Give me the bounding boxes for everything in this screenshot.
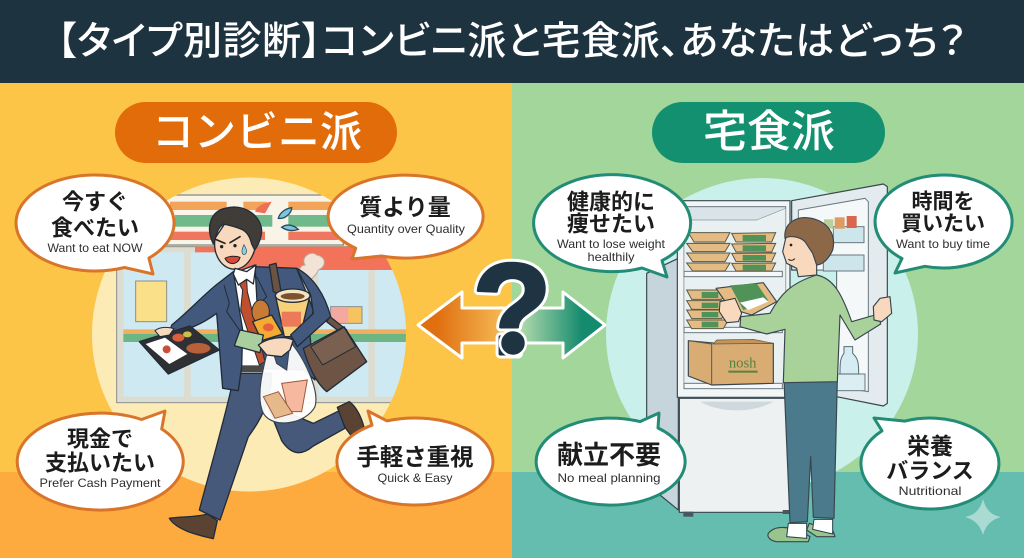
callout: lose weight healthily: healthily bbox=[588, 250, 634, 264]
callout: want to eat now bbox=[16, 175, 174, 274]
callout: quick and easy: Quick & Easy bbox=[378, 471, 452, 485]
sweat drops bbox=[278, 208, 298, 231]
panel: home delivery background bbox=[512, 83, 1024, 558]
callout: no meal planning bbox=[536, 413, 685, 505]
heading: home delivery type bbox=[652, 102, 885, 163]
callout: want to eat now: 食べたい bbox=[51, 216, 139, 240]
jacket left and arm bbox=[169, 272, 243, 391]
callout: prefer cash payment: 支払いたい bbox=[45, 450, 155, 476]
meal stacks: green trays bbox=[732, 233, 776, 271]
callout: want to buy time: Want to buy time bbox=[896, 237, 990, 251]
callout: no meal planning: 献立不要 bbox=[557, 440, 661, 470]
fridge side bbox=[647, 258, 678, 510]
fridge freezer drawer bbox=[679, 398, 791, 517]
callout: want to buy time bbox=[875, 175, 1012, 273]
callout: want to buy time: 時間を bbox=[912, 190, 974, 214]
callout: nutritional balance: Nutritional bbox=[898, 484, 962, 498]
tie bbox=[239, 280, 265, 365]
head bbox=[210, 207, 262, 269]
meal stacks: lower shelf bbox=[687, 290, 728, 329]
bag shoulder strap bbox=[327, 317, 347, 333]
rear leg bbox=[267, 403, 345, 453]
nosh cardboard box bbox=[688, 339, 773, 385]
callout: prefer cash payment: 現金で bbox=[67, 426, 133, 452]
meal stacks: brown trays bbox=[687, 233, 730, 271]
callout: want to buy time: 買いたい bbox=[901, 212, 985, 236]
hand bbox=[258, 338, 293, 357]
callout: nutritional balance: バランス bbox=[886, 458, 974, 484]
front leg bbox=[199, 373, 272, 520]
callout: lose weight healthily: Want to lose weight bbox=[557, 237, 666, 251]
steam bbox=[299, 253, 324, 285]
illustration: refrigerator bbox=[647, 184, 887, 517]
icon: double arrow bbox=[418, 292, 605, 358]
shelves bbox=[684, 271, 782, 389]
meal tray in hand bbox=[716, 283, 777, 323]
callout: prefer cash payment: Prefer Cash Payment bbox=[40, 476, 161, 490]
heading: convenience store type bbox=[115, 102, 397, 163]
croquette bbox=[252, 300, 283, 341]
header bar bbox=[0, 0, 1024, 83]
heading: home delivery type: 宅食派 bbox=[703, 108, 835, 156]
lapels bbox=[224, 277, 267, 333]
callout: lose weight healthily: 健康的に bbox=[567, 190, 655, 214]
torso jacket right bbox=[255, 267, 315, 380]
instant noodle cup bbox=[275, 289, 310, 337]
door shelves bbox=[823, 216, 865, 391]
sweater and arms bbox=[740, 275, 881, 383]
cash bbox=[234, 330, 263, 353]
plastic bag bbox=[260, 342, 316, 423]
callout: quantity over quality: Quantity over Quality bbox=[347, 222, 465, 236]
illustration: man at fridge bbox=[716, 218, 892, 542]
bento box bbox=[139, 326, 219, 374]
shirt bbox=[233, 265, 261, 370]
illustration: convenience store facade bbox=[117, 195, 410, 403]
callout: nutritional balance bbox=[861, 418, 999, 509]
icon: question mark: ? bbox=[472, 236, 552, 382]
belt bbox=[239, 365, 263, 372]
panel: convenience store background bbox=[0, 83, 512, 558]
rear shoe bbox=[337, 402, 364, 435]
head bbox=[783, 218, 834, 277]
callout: lose weight healthily: 痩せたい bbox=[567, 212, 655, 236]
callout: quick and easy: 手軽さ重視 bbox=[357, 444, 473, 470]
callout: want to eat now: Want to eat NOW bbox=[48, 241, 143, 255]
front shoe bbox=[169, 514, 217, 539]
shoulder bag bbox=[303, 327, 367, 392]
callout: quantity over quality bbox=[328, 175, 483, 259]
right hand on door bbox=[873, 297, 892, 322]
nosh cardboard box: nosh bbox=[729, 355, 757, 371]
pants bbox=[784, 380, 837, 523]
callout: no meal planning: No meal planning bbox=[558, 471, 660, 485]
collar bbox=[233, 265, 256, 285]
icon: sparkle bbox=[965, 499, 1001, 535]
jacket right arm bbox=[291, 268, 331, 347]
slippers bbox=[768, 519, 835, 542]
fridge top compartment bbox=[677, 201, 790, 397]
water bottle bbox=[840, 347, 859, 374]
illustration: rushing businessman bbox=[139, 207, 367, 539]
callout: lose weight healthily bbox=[534, 175, 691, 277]
door bbox=[792, 184, 887, 406]
callout: nutritional balance: 栄養 bbox=[907, 433, 953, 459]
heading: convenience store type: コンビニ派 bbox=[152, 108, 362, 156]
title: 【タイプ別診断】コンビニ派と宅食派、あなたはどっち？ bbox=[57, 20, 966, 64]
shoulder strap bbox=[269, 263, 282, 295]
callout: want to eat now: 今すぐ bbox=[62, 190, 128, 214]
callout: quantity over quality: 質より量 bbox=[359, 194, 451, 220]
callout: quick and easy bbox=[337, 411, 493, 505]
icon: question mark: ? bbox=[472, 236, 552, 382]
callout: prefer cash payment bbox=[17, 411, 183, 510]
